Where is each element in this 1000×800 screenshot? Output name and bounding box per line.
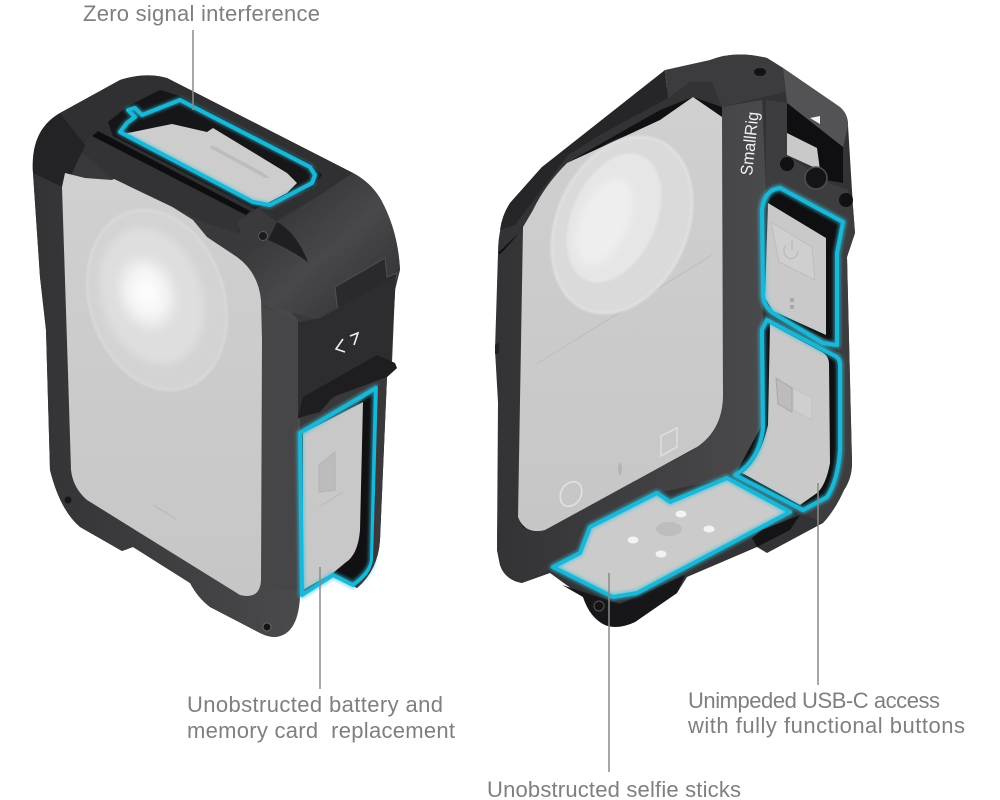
right cage body silhouette <box>495 54 855 627</box>
rear opening black <box>787 103 843 183</box>
lens highlight <box>102 242 192 344</box>
slot label <box>793 388 812 420</box>
dot two <box>628 536 638 544</box>
left camera cage <box>33 75 400 637</box>
latch side plate <box>263 276 396 430</box>
side panel icon <box>319 452 335 492</box>
side screw <box>64 496 72 504</box>
clasp <box>335 258 397 314</box>
left cage corner shading <box>33 113 85 187</box>
top slot cyan glow <box>120 100 315 205</box>
lens inner <box>548 139 680 297</box>
small hole right <box>839 193 853 207</box>
right cage top ridge <box>500 70 668 230</box>
leader line: battery <box>319 567 321 689</box>
lens highlight <box>563 170 645 274</box>
bottom screw <box>263 623 271 631</box>
square icon <box>661 428 677 456</box>
left chevron <box>336 339 345 352</box>
bottom panel cyan glow <box>553 478 790 597</box>
latch clip <box>298 355 397 418</box>
bottom panel cyan outline <box>553 478 790 597</box>
bottom gray panel <box>553 478 790 597</box>
dot four <box>656 550 666 558</box>
hinge knuckle <box>237 208 277 247</box>
label: usb: with fully functional buttons <box>687 713 965 738</box>
label: battery: Unobstructed battery and <box>187 692 443 717</box>
hinge screw <box>258 232 268 240</box>
lens inner <box>83 214 221 378</box>
top slot black interior <box>108 90 322 209</box>
lower panel cyan glow <box>735 320 840 510</box>
top back plate <box>783 68 848 148</box>
right frame front <box>498 97 723 532</box>
shutter ring icon <box>556 478 586 510</box>
lower side gray panel <box>742 324 830 505</box>
face seam line <box>535 255 712 365</box>
top window port detail <box>210 145 270 178</box>
upper side gray panel <box>765 203 826 335</box>
lens outer <box>525 115 719 335</box>
top corner screw <box>754 68 766 76</box>
left cage top surface <box>60 75 353 233</box>
side panel seam <box>319 492 343 507</box>
upper side indicator marks <box>790 298 794 312</box>
upper panel cyan outline <box>762 188 843 345</box>
right lower dark feet <box>562 575 685 627</box>
corner wedge shadow <box>268 222 308 262</box>
face detail marks <box>153 505 176 519</box>
top window gray <box>122 124 297 203</box>
upper panel cyan glow <box>762 188 843 345</box>
dot one <box>676 510 686 518</box>
rear side plate <box>766 100 855 523</box>
frame strip by latch <box>262 305 298 590</box>
corner block <box>238 173 400 320</box>
label: usb: Unimpeded USB-C access <box>688 688 940 713</box>
mic dot <box>618 463 622 475</box>
side panel cyan glow <box>300 388 376 595</box>
tripod hole <box>805 167 827 189</box>
bottom dots <box>628 510 714 558</box>
label: battery: memory card replacement <box>187 718 455 743</box>
side panel cyan outline <box>300 388 376 595</box>
top back plate triangle <box>810 116 820 124</box>
side frame outer strip <box>355 377 387 588</box>
top slot cyan outline <box>120 100 315 205</box>
label: signal: Zero signal interference <box>83 1 320 26</box>
power icon <box>784 240 798 259</box>
leader line: top <box>192 30 194 110</box>
right frame band <box>497 100 766 583</box>
leader line: selfie <box>608 573 610 772</box>
hinge bar <box>84 130 250 232</box>
camera lens <box>65 192 249 408</box>
camera face <box>62 173 262 596</box>
rear opening gray window <box>787 133 820 170</box>
left column of frame <box>33 173 300 637</box>
lower side black <box>735 320 840 510</box>
lens outer ring <box>65 192 249 408</box>
right camera cage <box>495 54 855 627</box>
bottom mount centre <box>656 522 682 536</box>
card slot icon <box>776 378 792 412</box>
small hole left <box>780 157 794 171</box>
upper side black <box>768 190 843 345</box>
left cage body silhouette <box>33 75 400 637</box>
right cage top corner <box>665 54 785 107</box>
side panel gray <box>303 402 363 590</box>
dot three <box>704 526 714 532</box>
bottom right foot <box>752 515 800 547</box>
side panel back strip <box>333 388 376 584</box>
right chevron <box>350 333 358 345</box>
lower panel cyan outline <box>735 320 840 510</box>
leader line: usb <box>817 483 819 685</box>
hinge bar black groove <box>92 131 250 215</box>
power button outline <box>771 222 815 280</box>
right camera face <box>518 97 723 531</box>
brand logo: SmallRig <box>737 111 763 176</box>
right lens <box>525 115 719 335</box>
left side button <box>495 342 499 354</box>
chevron icon <box>336 333 358 352</box>
bottom screw <box>594 601 604 611</box>
